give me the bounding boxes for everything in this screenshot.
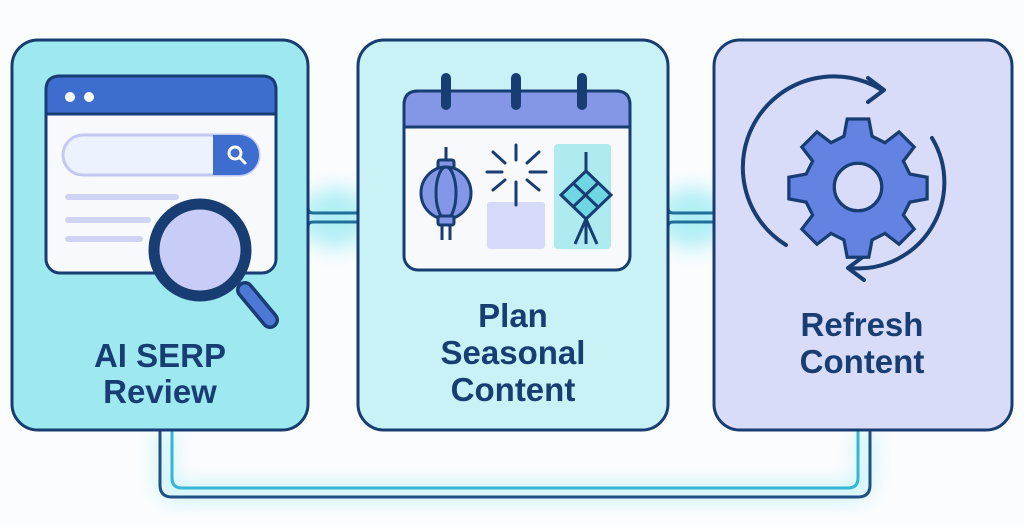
panel: AI SERP Review [12, 40, 308, 430]
icon: refresh arrows [743, 76, 944, 280]
icon: gear [789, 119, 927, 257]
panel: AI SERP Review: Review [103, 373, 217, 410]
panel: Plan Seasonal Content: Seasonal [441, 334, 585, 371]
label: AI SERP [94, 337, 226, 374]
firework [487, 145, 546, 205]
panel: Refresh Content [714, 40, 1012, 430]
icon: browser window [46, 76, 276, 273]
connector: panel 1 to 2 [300, 188, 370, 248]
lantern [421, 147, 471, 240]
label: Plan [478, 297, 548, 334]
connector: bottom loop [160, 430, 870, 497]
ketupat [561, 152, 611, 244]
panel: Refresh Content: Content [800, 343, 924, 380]
connector: panel 2 to 3 [657, 188, 727, 248]
icon: calendar [404, 78, 630, 270]
icon: magnifier [154, 204, 270, 320]
label: Refresh [801, 306, 923, 343]
panel: Plan Seasonal Content: Content [451, 371, 575, 408]
panel: Plan Seasonal Content [358, 40, 668, 430]
